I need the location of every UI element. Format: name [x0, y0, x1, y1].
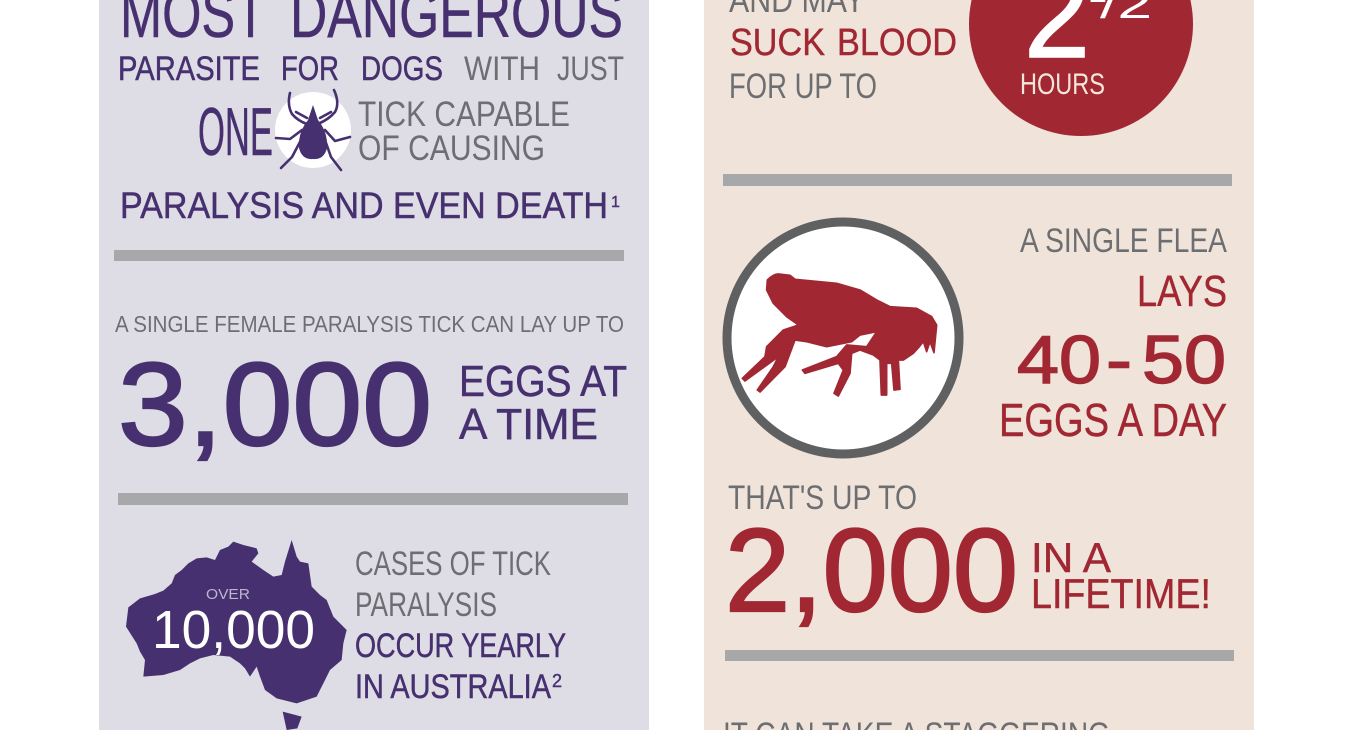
text: cases of tick paralysis	[355, 545, 566, 706]
stat: 2,000: 2,000	[725, 505, 1018, 637]
text: parasite for dogs: DOGS	[361, 50, 443, 88]
text: parasite for dogs: PARASITE	[118, 50, 260, 88]
badge: 2 1/2 hours	[969, 0, 1193, 136]
stat: 40-50: 50	[1142, 322, 1226, 398]
text: suck blood: SUCK	[730, 22, 825, 64]
text: in a lifetime: IN A	[1031, 534, 1111, 581]
text: with just: WITH	[464, 50, 540, 88]
text: tick capable: TICK CAPABLE	[358, 95, 570, 134]
text: paralysis and even death: PARALYSIS AND EVEN DEATH	[120, 185, 608, 226]
text: cases of tick paralysis: OCCUR YEARLY	[355, 627, 566, 665]
stat: 10,000: 10,000	[152, 600, 315, 660]
text: with just: JUST	[557, 50, 624, 88]
text: suck blood	[730, 22, 957, 64]
text: with just	[464, 50, 624, 88]
panel: fleas	[704, 0, 1254, 730]
label: over: OVER	[206, 586, 250, 603]
text: in a lifetime	[1031, 534, 1211, 617]
text: paralysis and even death: 1	[611, 194, 620, 211]
heading: most dangerous	[120, 0, 623, 52]
icon: flea	[727, 222, 959, 454]
panel: ticks	[99, 0, 649, 730]
text: eggs a day: EGGS A DAY	[999, 394, 1227, 446]
text: for up to: FOR UP TO	[729, 67, 877, 106]
text: single female tick: A SINGLE FEMALE PARALYSIS TICK CAN LAY UP TO	[115, 311, 624, 337]
text: eggs at a time: A TIME	[459, 400, 598, 449]
text: cases of tick paralysis: PARALYSIS	[355, 586, 497, 624]
text: eggs at a time: EGGS AT	[459, 357, 627, 406]
stat: 40-50: 40	[1017, 322, 1101, 398]
text: cases of tick paralysis: CASES OF TICK	[355, 545, 551, 583]
text: a single flea: A SINGLE FLEA	[1020, 222, 1227, 260]
text: parasite for dogs: FOR	[281, 50, 339, 88]
map: australia	[126, 540, 347, 730]
text: parasite for dogs	[118, 50, 443, 88]
text: suck blood: BLOOD	[837, 22, 957, 64]
text: in a lifetime: LIFETIME!	[1031, 570, 1211, 617]
text: that's up to: THAT'S UP TO	[728, 479, 917, 517]
stat: 3,000: 3,000	[118, 339, 432, 471]
icon: tick	[275, 90, 351, 170]
stat: 40-50	[1017, 322, 1226, 398]
text: one: ONE	[198, 94, 273, 170]
text: cases of tick paralysis: IN AUSTRALIA	[355, 668, 551, 706]
text: lays: LAYS	[1137, 267, 1227, 316]
stat: 40-50: -	[1106, 322, 1132, 398]
text: cases of tick paralysis: 2	[552, 671, 562, 691]
text: of causing: OF CAUSING	[358, 129, 545, 168]
badge: 2 1/2 hours: HOURS	[1020, 68, 1105, 101]
text: eggs at a time	[459, 357, 627, 449]
